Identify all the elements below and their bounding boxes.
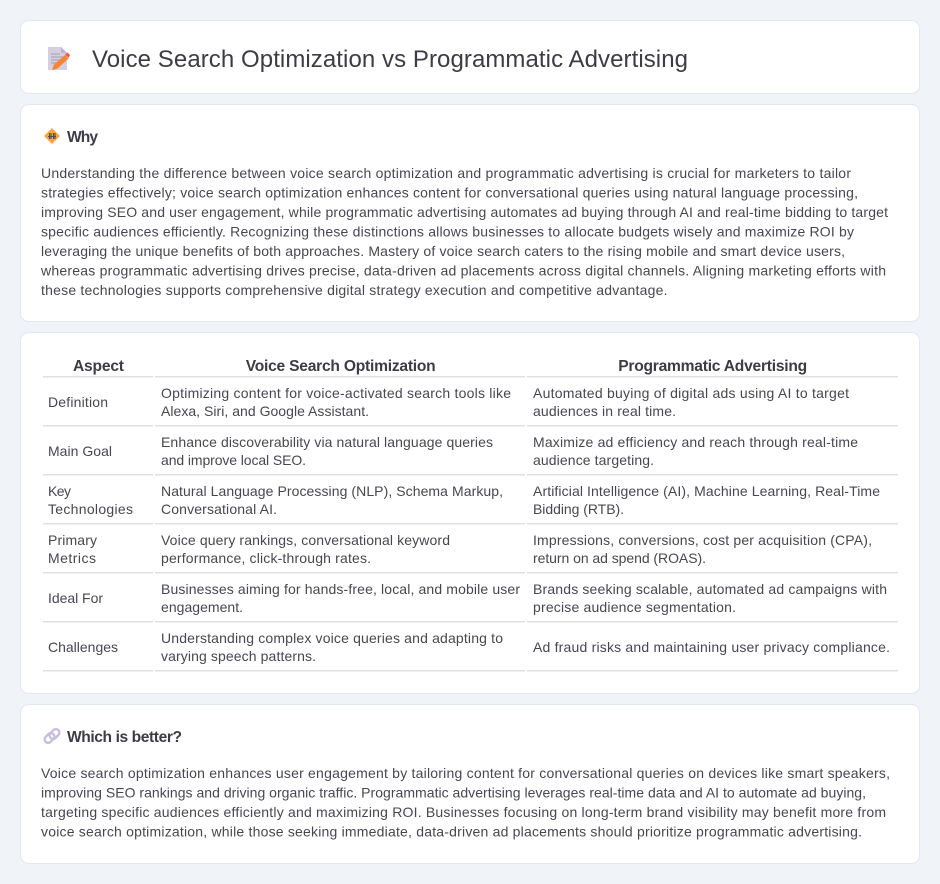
- icon: chain link: [43, 728, 61, 744]
- text block: why paragraph: [40, 165, 888, 298]
- row: challenges: [48, 630, 890, 664]
- text block: why paragraph: leveraging the unique benefits of both approaches. Mastery of voice search caters to the rising mobile and smart device users,: [41, 243, 845, 259]
- row: ideal for: Brands seeking scalable, automated ad campaigns with: [533, 581, 887, 597]
- row: key technologies: Artificial Intelligence (AI), Machine Learning, Real-Time: [533, 483, 880, 499]
- row: ideal for: engagement.: [161, 599, 243, 615]
- row: primary metrics: Primary: [48, 532, 97, 548]
- row: main goal: and improve local SEO.: [161, 452, 306, 468]
- row: ideal for: Ideal For: [48, 590, 103, 606]
- row: primary metrics: return on ad spend (ROAS).: [533, 550, 706, 566]
- row: primary metrics: performance, click-through rates.: [161, 550, 371, 566]
- row: ideal for: Businesses aiming for hands-free, local, and mobile user: [161, 581, 520, 597]
- row: primary metrics: [48, 532, 872, 566]
- text block: why paragraph: strategies effectively; voice search optimization enhances content for conversational queries using natural language processing,: [41, 184, 858, 200]
- row: challenges: Challenges: [48, 639, 118, 655]
- row: key technologies: Natural Language Processing (NLP), Schema Markup,: [161, 483, 503, 499]
- row: definition: [48, 385, 849, 419]
- row: primary metrics: Voice query rankings, conversational keyword: [161, 532, 450, 548]
- text block: which is better paragraph: Voice search optimization enhances user engagement by tailoring content for conversational queries on devices like smart speakers,: [41, 765, 890, 781]
- table header: Voice Search Optimization: [246, 358, 436, 375]
- panel: comparison table: [20, 332, 920, 694]
- title: Voice Search Optimization vs Programmatic Advertising: [92, 46, 688, 73]
- table header: Aspect: [73, 358, 124, 375]
- text block: why paragraph: Understanding the difference between voice search optimization and programmatic advertising is crucial for marketers to tailor: [41, 165, 851, 181]
- row: key technologies: Bidding (RTB).: [533, 501, 624, 517]
- row: main goal: Maximize ad efficiency and reach through real-time: [533, 434, 858, 450]
- row: main goal: [48, 434, 858, 468]
- row: definition: Definition: [48, 394, 108, 410]
- row: key technologies: Technologies: [48, 501, 133, 517]
- panel: which is better: [20, 704, 920, 864]
- row: key technologies: Conversational AI.: [161, 501, 277, 517]
- row: ideal for: [48, 581, 887, 615]
- row: main goal: Enhance discoverability via natural language queries: [161, 434, 493, 450]
- row: main goal: Main Goal: [48, 443, 112, 459]
- row: key technologies: Key: [48, 483, 71, 499]
- row: main goal: audience targeting.: [533, 452, 654, 468]
- row: definition: audiences in real time.: [533, 403, 676, 419]
- row: ideal for: precise audience segmentation.: [533, 599, 736, 615]
- row: key technologies: [48, 483, 880, 517]
- row: primary metrics: Impressions, conversions, cost per acquisition (CPA),: [533, 532, 872, 548]
- text block: why paragraph: specific audiences efficiently. Recognizing these distinctions allows businesses to allocate budgets wisely and maximize ROI by: [41, 224, 854, 240]
- row: challenges: Understanding complex voice queries and adapting to: [161, 630, 503, 646]
- row: challenges: Ad fraud risks and maintaining user privacy compliance.: [533, 639, 890, 655]
- row: primary metrics: Metrics: [48, 550, 96, 566]
- text block: which is better paragraph: voice search optimization, while those seeking immediate, data-driven ad placements should prioritize programmatic advertising.: [41, 824, 862, 840]
- icon: orange diamond: [44, 128, 60, 144]
- text block: why paragraph: whereas programmatic advertising drives precise, data-driven ad placements across digital channels. Aligning marketing efforts with: [40, 262, 886, 278]
- panel: title header: [20, 20, 920, 94]
- row: definition: Automated buying of digital ads using AI to target: [533, 385, 849, 401]
- table header: [73, 358, 807, 375]
- text block: which is better paragraph: targeting specific audiences efficiently and maximizing ROI. Businesses focusing on long-term brand visibility may benefit more from: [41, 804, 886, 820]
- table header: Programmatic Advertising: [618, 358, 807, 375]
- heading: why: Why: [67, 129, 98, 146]
- icon: document with pencil: [48, 47, 70, 70]
- panel: why: [20, 104, 920, 322]
- row: definition: Alexa, Siri, and Google Assistant.: [161, 403, 369, 419]
- text block: which is better paragraph: [41, 765, 890, 840]
- heading: which is better: Which is better?: [67, 729, 182, 746]
- text block: why paragraph: improving SEO and user engagement, while programmatic advertising automates ad buying through AI and real-time bidding to target: [41, 204, 888, 220]
- text block: why paragraph: these technologies supports comprehensive digital strategy execution and competitive advantage.: [41, 282, 668, 298]
- row: definition: Optimizing content for voice-activated search tools like: [161, 385, 511, 401]
- text block: which is better paragraph: improving SEO rankings and driving organic traffic. Programmatic advertising leverages real-time data and AI to automate ad buying,: [41, 784, 866, 800]
- row: challenges: varying speech patterns.: [161, 648, 316, 664]
